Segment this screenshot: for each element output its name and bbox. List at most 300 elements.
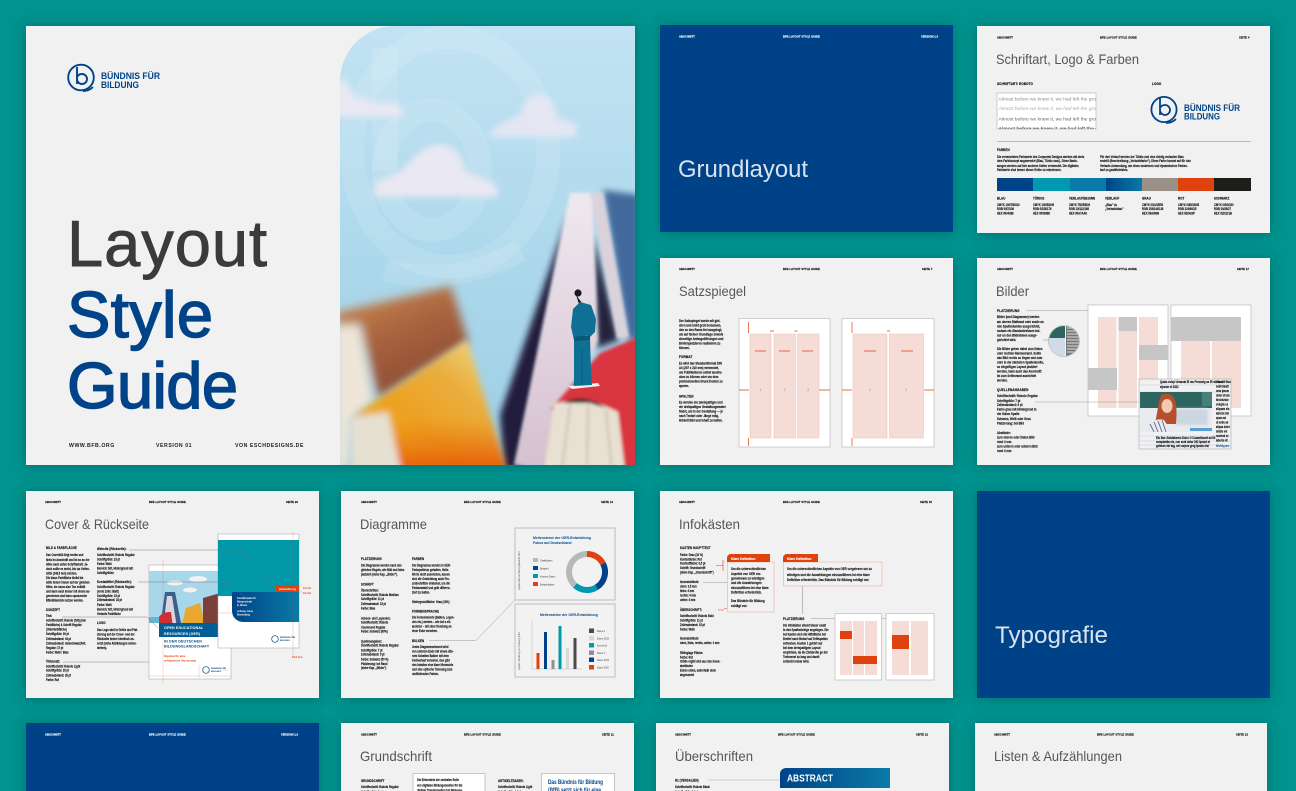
placement text: PLATZIERUNG [783, 617, 805, 621]
page title: Satzspiegel [679, 283, 746, 299]
donut ring [569, 554, 605, 590]
left text column: Höhe. sie muss also Ton enthält [46, 585, 85, 589]
H1 specification: H1 (VERSALIEN) [675, 778, 699, 783]
specification text: Schriftgröße: 11 pt [680, 618, 703, 623]
body text: FORMAT [679, 355, 693, 359]
specification text: oben: 3,5 mm [680, 584, 697, 589]
right text column: den etc.) werden – wie bei a ein [412, 620, 451, 624]
placement text: sofreuhen. Kasten 1 gehört nur [783, 641, 823, 646]
right text column: und eine optische Trennung zum [412, 667, 452, 672]
specification text: Kontextfarbe: Rot [680, 557, 702, 562]
colour labels: RGB 224/66/15 [1178, 207, 1197, 211]
body text: Schriftgröße: 7 pt [997, 399, 1021, 403]
donut chart card: Fokus auf Deutschland [533, 541, 572, 545]
right text column: Schriftschnitt: Roboto Regular [97, 585, 135, 589]
cover footer: VERSION 01 [156, 443, 192, 449]
two-column grid diagram: 1 [869, 388, 871, 392]
running header: SEITE 4 [1239, 36, 1250, 40]
logo: BÜNDNIS FÜR [1184, 103, 1240, 113]
body text: professionellen Druck Kosten zu [679, 379, 723, 384]
body text: PLATZIERUNG [997, 309, 1020, 313]
right text column: LOGO [97, 621, 106, 625]
right text column: setzt (siehe Abbildungen neben- [97, 641, 137, 646]
panel: Typografie [977, 491, 1270, 698]
right text column: Die Formelemente (Balken, Legen- [412, 615, 454, 620]
clouds [335, 80, 577, 197]
bars [536, 626, 576, 669]
bar chart legend: Kontext B [597, 644, 607, 648]
back cover mockup: Kontaktstelle für [237, 597, 256, 600]
colour text: erstellt (Beschreibung „Verlaufsfarbe“). Diese Farbe kommt auf für den [1100, 159, 1191, 163]
info box: narrow: Definition erforderlich. [731, 590, 762, 595]
right text column: Werte nicht ausreichen, lassen [412, 572, 450, 577]
layout with portrait photo: ursa ipsum [1216, 388, 1229, 393]
body text: der linken Spalte [997, 412, 1020, 416]
running header: BFB LAYOUT STYLE GUIDE [1100, 267, 1137, 271]
specification text: KASTEN HAUPTTEXT [680, 546, 711, 550]
font sample: Almost before we knew it, we had left the ground [998, 96, 1104, 102]
colour labels: RGB 0/67/136 [997, 207, 1014, 211]
placement text: Breitef nach Bedarf auf Drittspalten [783, 637, 828, 641]
right text column: Farbe: Weiß [97, 562, 112, 566]
back cover mockup: Bürgerschaft [237, 600, 252, 604]
back cover mockup: Musterberg [237, 614, 251, 616]
layout with portrait photo: laboris sit [1216, 438, 1228, 443]
cover footer: VON ESCHDESIGNS.DE [235, 443, 304, 449]
left text column: Schriftgröße: 30 pt [46, 632, 69, 636]
body text: zum unteren oder unteren Bild [997, 444, 1038, 449]
colour labels: RGB 10/122/166 [1069, 207, 1089, 211]
layout with portrait photo: Quam volup Ursanda Et ras Perunsig as Et sin non [1160, 380, 1222, 384]
right text column: Verlaufs Farbfläche [97, 612, 121, 616]
running header [361, 732, 614, 736]
body text: Platzierung: bei Bild [997, 421, 1024, 426]
right text column: Das Logo wird in Größe und Plat- [97, 628, 138, 632]
back cover mockup: BÜNDNIS FÜR [280, 636, 295, 639]
running header [679, 267, 933, 271]
body text [996, 309, 1044, 453]
left text column: mitte (148,5 mm) reichen. [46, 571, 77, 576]
info box: wide [783, 554, 882, 586]
running header: SEITE 13 [1236, 732, 1248, 736]
logo: BILDUNG [1184, 112, 1220, 122]
running header [675, 732, 928, 736]
right text column: Zeilenabstand: 24 pt [97, 598, 122, 602]
right text column: stehen). [97, 646, 107, 650]
left text column: (siehe Kap. „Bilder“) [361, 666, 386, 670]
left text column: Zeilenabstand: mm/schwarz/fett. [46, 641, 86, 646]
running header [994, 732, 1248, 736]
body text: nach Textart oder -länge mög- [679, 414, 719, 418]
back cover mockup: 12,5 mm [292, 655, 303, 659]
layout with portrait photo: gelesen ein tag, nei corpus greg ipsum nisi [1156, 444, 1209, 448]
article text specification: ARTIKELTEASER: [498, 779, 524, 783]
layout diagram: three columns [835, 614, 882, 680]
front cover mockup: BILDUNGSLANDSCHAFT [164, 644, 210, 648]
left text column: Farbfläche) & Schrift Regular [46, 623, 82, 627]
back cover mockup: BILDUNG [280, 640, 290, 642]
right text column [412, 557, 454, 676]
donut chart card: Quelle: bfb-oer Bildungsbericht 2021 [518, 551, 521, 590]
right text column: Kontakttitel (Rückseite): [97, 580, 132, 584]
body text: QUELLENANGABEN [997, 388, 1029, 392]
body text: Bilder (und Diagramme) werden [997, 315, 1039, 319]
font sample: Almost before we knew it, we had left the ground [998, 126, 1112, 132]
teaser box [542, 774, 614, 791]
info box: wide: würdigen und die Auswirkungen einzuzuführen ist eine klare [786, 573, 870, 577]
logo: LOGO [1152, 82, 1162, 86]
info box: wide: Um die unterschiedlichen Aspekte von OER vorgelesen um zu [787, 567, 872, 571]
running header: VERSION 1.0 [921, 34, 939, 38]
left text column: Schriftschnitt: Roboto Regular [361, 643, 399, 648]
page title: Bilder [996, 283, 1029, 299]
left text column: Überschriften: [361, 588, 379, 593]
back cover mockup: 15 mm [303, 586, 312, 590]
specification text: abgerundet [680, 673, 694, 677]
colour text: Die verwendeten Farbwerte des Corporate Designs werden mit stets [997, 155, 1084, 159]
body text: findet, um in der Gestaltung — je [679, 409, 723, 414]
body text: Schriftschnitt: Roboto Regular [997, 394, 1038, 398]
right text column: Farbverlauf versehen. Das gibt [412, 658, 450, 663]
running header: ABSCHNITT [997, 36, 1013, 40]
placement diagram: right page [1171, 305, 1251, 416]
left text column: Titel: [46, 614, 52, 618]
body text: zum oberen oder linken Bild [997, 435, 1035, 440]
right text column: Bereich: fett, Hintergrund mit [97, 566, 133, 571]
sample text box [413, 774, 485, 791]
body text: im zum Seitenrand ausrichtet [997, 374, 1037, 378]
panel: Überschriften [656, 723, 949, 791]
body specification [361, 779, 399, 791]
panel: Cover & Rückseite [26, 491, 319, 698]
bar chart legend [589, 628, 610, 670]
connector lines [703, 582, 886, 618]
layout with portrait photo: nostrud ex [1216, 433, 1229, 438]
cover footer [69, 443, 304, 449]
left text column: BfB-Bildarchiv nutzen werden. [46, 598, 84, 603]
right text column: FARBEN [412, 557, 424, 561]
cover photo: books and figure [335, 26, 640, 470]
placement text: bei Kasten sich die Hilfsfläche bei [783, 632, 826, 637]
tall book pages [514, 192, 629, 465]
font sample: Almost before we knew it, we had left the ground [998, 106, 1104, 112]
colour labels: RGB 29/29/27 [1214, 207, 1231, 211]
right text column: einer Ecke versehen. [412, 629, 438, 633]
running header: BFB LAYOUT STYLE GUIDE [464, 732, 501, 736]
three-column grid diagram: 3 [807, 388, 809, 392]
right text column: Website (Rückseite): [97, 547, 127, 551]
back cover mockup [218, 532, 312, 659]
abstract heading sample [780, 768, 890, 788]
specification text: Größe ergibt sich aus den Innen- [680, 659, 720, 664]
left text column: mitte immer immer auf der gleichen [46, 580, 90, 585]
running header: ABSCHNITT [994, 732, 1010, 736]
running header [679, 500, 932, 504]
bar chart card: Meilensteine der OER-Entwicklung [540, 613, 598, 617]
placement text: Textmenst zu lang und damit [783, 655, 820, 659]
layout with portrait photo: complantia nis, con sunt dolor 292 ipsunt et [1156, 440, 1210, 444]
left text column: Farbe: Schwarz (80%) [361, 629, 388, 634]
colour labels: HEX #E0420F [1178, 211, 1195, 216]
colour labels: CMYK 100/75/0/10 [997, 203, 1020, 207]
bar chart legend: Daten C [597, 652, 606, 655]
running header: ABSCHNITT [679, 34, 695, 38]
left text column: platziert (siehe Kap. „Bilder“). [361, 572, 398, 577]
info box: narrow: einzuzuführen ist eine klare [731, 586, 769, 590]
cover logo [68, 65, 160, 91]
panel: Schriftart, Logo & Farben [977, 26, 1270, 233]
layout with portrait photo: aliquam sin [1216, 406, 1230, 411]
three-column grid diagram: 1 [760, 388, 762, 392]
right text column: Hintergrundfläche: Grau (10%) [412, 600, 449, 604]
running header: BFB LAYOUT STYLE GUIDE [149, 500, 186, 504]
body text [679, 319, 726, 423]
panel: Grundlayout [660, 25, 953, 232]
specification text: Kontextfläche: 0,5 pt [680, 561, 705, 566]
body specification: Schriftschnitt: Roboto Regular [361, 785, 399, 789]
connector lines [1026, 310, 1142, 402]
colour labels [997, 195, 1234, 216]
left text column: Regular: 17 pt [46, 646, 63, 650]
layout with portrait photo: sebi blandi [1216, 384, 1229, 389]
front cover mockup: RESOURCES (OER) [164, 632, 201, 636]
panel: Infokästen [660, 491, 953, 698]
body text: Zeilenabstand: 9 pt [997, 403, 1023, 407]
layout with portrait photo: minim vel [1216, 429, 1227, 434]
left text column: SCHRIFT [361, 582, 375, 587]
colour text: Farbwerte sind immer dieser Reihe zu entnehmen. [997, 168, 1061, 172]
specification text: links: 4 mm [680, 589, 694, 593]
page title: Listen & Aufzählungen [994, 748, 1122, 764]
info box: narrow: Das Bündnis für Bildung [731, 599, 765, 603]
layout with portrait photo: tinciduntur [1216, 397, 1229, 402]
three-column grid diagram: 2 [784, 388, 786, 392]
body text: so eingefügen Layout platziert [997, 365, 1038, 369]
specification text: Ecken unten, außerhalb oben [680, 668, 716, 673]
layout with portrait photo: laboris nisi [1216, 411, 1229, 416]
running header: SEITE 11 [602, 732, 614, 736]
body text: rund 4 mm [997, 440, 1011, 444]
cover footer: WWW.BFB.ORG [69, 443, 115, 449]
right text column: Farbspektrum gehalten. Helle- [412, 568, 449, 572]
left text column: Zeilenabstand: 15 pt [361, 602, 386, 606]
colour labels: HEX #0A7AA6 [1069, 211, 1087, 216]
left text column: KONZEPT [46, 608, 61, 612]
page title: Cover & Rückseite [45, 516, 149, 532]
body text: A4 (297 x 210 mm) verwendet, [679, 366, 719, 370]
running header [679, 34, 939, 38]
body text: am oberen Blattrand oder sowie an [997, 320, 1044, 324]
front cover mockup [149, 560, 231, 684]
body text: Abstände: [997, 431, 1011, 435]
running header: SEITE 17 [1237, 267, 1249, 271]
running header: BFB LAYOUT STYLE GUIDE [783, 34, 820, 38]
colour text: Für den Verlauf werden der Türkis und eine richtig verlaufen Blau [1100, 155, 1184, 159]
left text column: und kann nach immer mit einem au- [46, 589, 90, 594]
right text column: nem Schatten Balken mit dem [412, 654, 449, 658]
body text: Farbe grau mit Hintergrund in [997, 407, 1037, 412]
colour labels: BLAU [997, 196, 1006, 201]
running header: ABSCHNITT [679, 267, 695, 271]
donut legend: Beispieldaten [540, 584, 555, 586]
specification text: Schrift: Grundschrift [680, 566, 705, 570]
running header [45, 732, 299, 736]
colour labels: RGB 0/153/176 [1033, 207, 1052, 211]
donut legend: Kontext Daten [540, 576, 556, 578]
layout diagram: two columns [886, 614, 934, 680]
info box: narrow [716, 554, 774, 612]
running header [997, 36, 1250, 40]
left text column: Schriftgröße: 26 pt [46, 668, 69, 673]
colour labels: CMYK 0/10/15/50 [1142, 203, 1163, 207]
cover title: Guide [67, 349, 238, 422]
colour text: dem Farbkonzept angewendet (Blau, Türkis usw.). Diese Basis- [997, 159, 1078, 163]
donut legend: Grafikdaten [540, 560, 553, 562]
colour labels: „Blau“ zu [1105, 203, 1117, 207]
running header: ABSCHNITT [45, 732, 61, 736]
colour labels: HEX #004388 [997, 211, 1014, 216]
colour labels: ROT [1178, 196, 1185, 201]
body text: ein dreispaltiges Gestaltungsraster [679, 405, 726, 409]
callout lines [62, 550, 276, 662]
left text column [361, 557, 405, 670]
left text column: Farbe: Weiß / Blau [46, 650, 69, 655]
running header: BFB LAYOUT STYLE GUIDE [783, 267, 820, 271]
panel: Bilder [977, 258, 1270, 465]
specification text: Innenabstände: [680, 580, 699, 584]
running header: BFB LAYOUT STYLE GUIDE [778, 732, 815, 736]
right text column: von unterem Ende mit einem dün- [412, 649, 454, 654]
right text column: Die Diagramme werden in OER- [412, 563, 451, 568]
left text column: Farbe: Blau [361, 606, 375, 611]
front cover mockup: erfolgreiche Umsetzung [164, 658, 196, 662]
specification text: Farbe: Grau (10 %) [680, 553, 703, 557]
placement text [783, 617, 829, 664]
layout with portrait photo: quam ad [1216, 415, 1226, 420]
left text column: Achsen- und Legenden: [361, 616, 390, 621]
donut chart card: Meilensteine der OER-Entwicklung [533, 536, 591, 540]
placement text: in den Spaltenbreige angelegen. Die [783, 628, 829, 632]
bar chart legend: Daten 2018 [597, 638, 610, 640]
running header: SEITE 7 [922, 267, 933, 271]
body text: den Spaltenkanten ausgerichtet, [997, 324, 1040, 329]
colour labels: SCHWARZ [1214, 196, 1229, 201]
abstract heading sample: ABSTRACT [787, 774, 833, 784]
body text: den so den Raum frei ausgelegt, [679, 328, 722, 332]
panel: Satzspiegel [660, 258, 953, 465]
donut chart card [515, 528, 615, 600]
colour text: FARBEN [997, 148, 1010, 152]
left text column: Schriftgröße: 11 pt [361, 597, 384, 601]
colour labels: CMYK 0/85/100/5 [1178, 203, 1199, 207]
right text column: den Inhalten eine klare Hierarchie [412, 663, 453, 667]
left text column: BILD & FARBFLÄCHE [46, 546, 77, 550]
running header: BFB LAYOUT STYLE GUIDE [1100, 36, 1137, 40]
yellow book [350, 340, 507, 470]
left text column: PLATZIERUNG [361, 557, 382, 561]
info box: narrow: Aspekte von OER vor- [731, 572, 761, 576]
colour labels: GRAU [1142, 196, 1151, 201]
specification text: Rötinglage Fläche: [680, 651, 703, 655]
specification text: Innenabstände: [680, 636, 699, 641]
info box: narrow: und die Auswirkungen [731, 581, 762, 585]
layout with portrait photo: aliqua dolor [1216, 424, 1230, 429]
left text column: Platzierung: bei Rand [361, 662, 387, 666]
bar chart legend: Daten A [597, 630, 606, 633]
cover title [67, 207, 267, 422]
right text column: zierung auf der Cover- und der [97, 632, 135, 637]
layout with portrait photo: sipsum et 2022 [1160, 385, 1179, 389]
body text: chen und nicht groß bemessen, [679, 323, 721, 328]
back cover mockup: in Altona [237, 604, 248, 607]
miniature figure [568, 289, 600, 389]
left text column: Zeilenabstand: 9 pt [361, 652, 385, 657]
page title: Grundschrift [360, 748, 432, 764]
left text column: (Unterfarbfläche) [46, 627, 67, 632]
specification text: oben, links, rechts, unten: 4 mm [680, 641, 720, 645]
left text column: Farbe: Schwarz (50 %) [361, 657, 388, 662]
page title: Infokästen [679, 516, 740, 532]
H1 specification: Schriftschnitt: Roboto Black [675, 785, 710, 789]
right text column: Schriftgröße: 23 pt [97, 557, 120, 562]
right text column [97, 547, 138, 650]
left text column: Schriftschnitt: Roboto (fett) (mm [46, 618, 86, 623]
right text column: sich die Gewichtung auch Pro- [412, 577, 450, 581]
cover logo: BILDUNG [101, 80, 139, 90]
left text column: doch sollte es meist, bis zur Seiten- [46, 567, 90, 571]
layout with portrait photo: dolor sit am [1216, 393, 1230, 398]
left text column [46, 546, 90, 682]
left text column: Höhe nach unten Schriftarbeit. Ja- [46, 562, 88, 567]
running header: VERSION 1.0 [281, 732, 299, 736]
two-column grid diagram: 2 [905, 388, 907, 392]
body text: können. [679, 346, 690, 350]
specification text: Zeilenabstand: 15 pt [680, 623, 705, 627]
article text specification [498, 779, 532, 791]
colour labels: CMYK 100/5/20/0 [1033, 203, 1054, 207]
article text specification: Schriftschnitt: Roboto Light [498, 785, 532, 789]
front cover mockup: IN DER DEUTSCHEN [164, 640, 202, 644]
right text column: (erste Zeile: Blatt) [97, 589, 119, 594]
body text: oder rechten Rahmenrand. Sollte [997, 351, 1041, 356]
panel: blue divider, bottom row [26, 723, 319, 791]
body text: gerichtet wird. [997, 338, 1016, 342]
specification text: unten: 4 mm [680, 598, 696, 602]
running header: BFB LAYOUT STYLE GUIDE [1097, 732, 1134, 736]
running header: ABSCHNITT [997, 267, 1013, 271]
body text: sodass ein Standardrahmen bei- [997, 329, 1040, 333]
portrait photo [1140, 392, 1212, 432]
right text column: Schriftgrößen [97, 571, 114, 575]
colour labels: TÜRKIS [1033, 195, 1045, 201]
colour text: ausgen werden auf hier anderen Seiten verwendet. Die digitalen [997, 164, 1079, 168]
running header: ABSCHNITT [361, 500, 377, 504]
left text column: gleichen Regeln, wie Bild und Infos [361, 568, 405, 572]
specification text [680, 546, 720, 677]
page title: Schriftart, Logo & Farben [996, 51, 1139, 67]
left text column: Schriftschnitt: Roboto Medium [361, 593, 399, 597]
watermark logo [372, 48, 526, 286]
body text: cken zu können oder um dem [679, 375, 718, 379]
two-column grid diagram [842, 318, 934, 447]
sample text box: von digitalen Bildungsmedien für die [417, 783, 463, 788]
font sample: Almost before we knew it, we had left the ground [998, 116, 1104, 122]
left text column: Zeilenabstand: 44 pt [46, 637, 71, 641]
running header: SEITE 23 [286, 500, 298, 504]
body text: sparen. [679, 384, 689, 388]
three-column grid diagram [739, 318, 830, 447]
left text column: Titelzusatz: [46, 659, 60, 664]
